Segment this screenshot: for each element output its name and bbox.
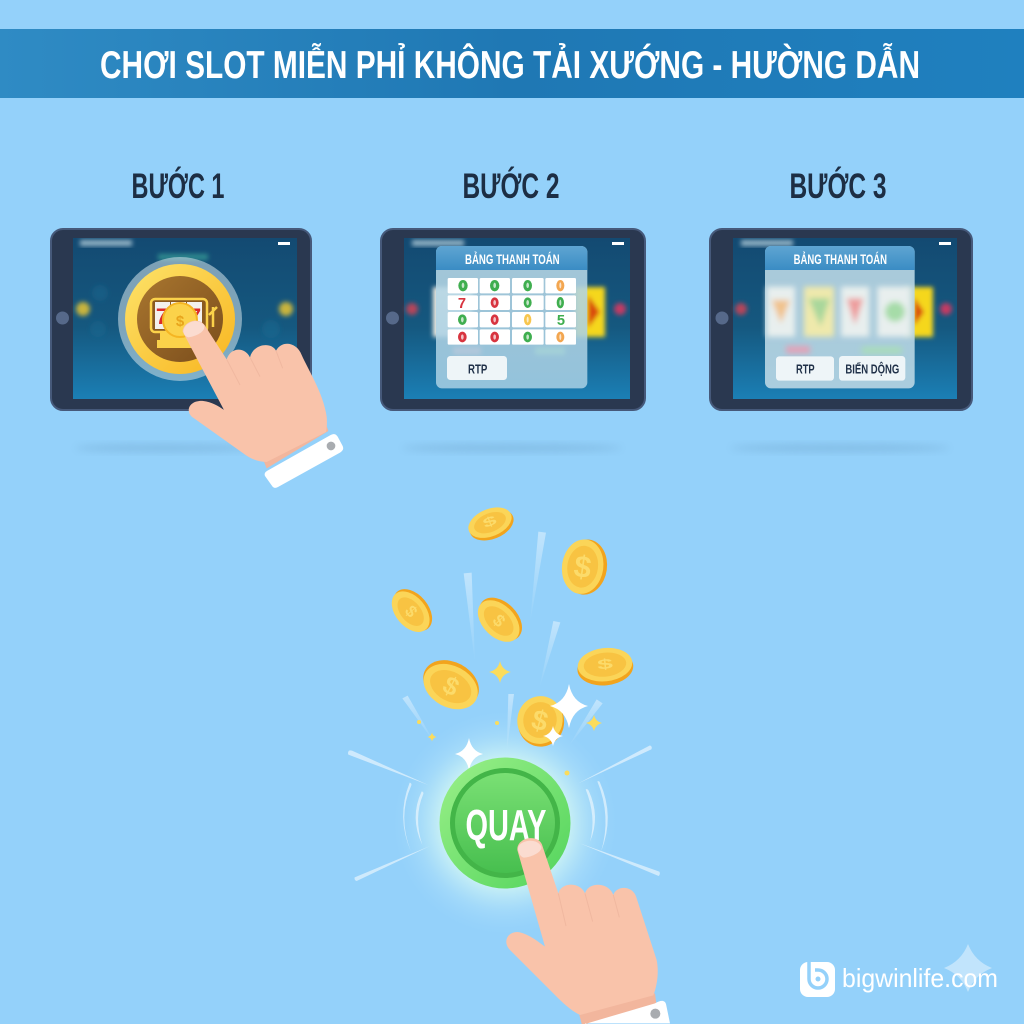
heading: step 3: BƯỚC 3 xyxy=(790,166,886,206)
panel: paytable: 7 xyxy=(458,296,466,312)
panel: paytable xyxy=(436,246,587,388)
panel: paytable: BẢNG THANH TOÁN xyxy=(465,252,560,267)
icon: slot machine medal: $ xyxy=(176,313,185,330)
coin: $ xyxy=(596,655,614,673)
coin xyxy=(384,582,440,640)
button: RTP xyxy=(776,356,834,381)
coin: $ xyxy=(572,549,593,585)
coin: $ xyxy=(481,513,499,531)
heading: step 2: BƯỚC 2 xyxy=(462,166,560,206)
coin xyxy=(414,651,487,718)
icon: slot machine medal xyxy=(118,257,242,381)
coin: $ xyxy=(438,671,463,702)
button: QUAY: QUAY xyxy=(466,801,546,850)
coins xyxy=(384,501,635,752)
panel: paytable with RTP and volatility: BẢNG THANH TOÁN xyxy=(794,252,887,267)
coin: $ xyxy=(528,703,552,738)
button: volatility: BIẾN DỘNG xyxy=(845,362,899,377)
glow xyxy=(393,711,617,935)
rays above button xyxy=(402,532,603,753)
cuff xyxy=(585,1001,670,1024)
coin xyxy=(511,691,570,752)
icon: slot machine medal: 7 xyxy=(156,304,168,329)
coin: $ xyxy=(489,610,510,631)
button: volatility xyxy=(839,356,905,381)
button: RTP: RTP xyxy=(796,362,815,377)
title banner xyxy=(0,29,1024,98)
watermark logo xyxy=(800,944,998,997)
panel: step 1 tablet xyxy=(51,229,311,410)
button: RTP: RTP xyxy=(468,361,487,376)
sparkles xyxy=(417,661,602,776)
heading: step 1: BƯỚC 1 xyxy=(132,166,224,206)
coin xyxy=(464,501,518,547)
motion lines xyxy=(348,745,660,881)
coin xyxy=(469,589,530,650)
icon: slot machine medal: 7 xyxy=(189,304,201,329)
button: RTP xyxy=(447,356,507,380)
tablet shadows xyxy=(75,444,950,452)
panel: step 3 tablet xyxy=(710,229,972,410)
watermark logo: bigwinlife.com xyxy=(842,963,998,993)
coin xyxy=(558,536,611,597)
panel: step 2 tablet xyxy=(381,229,645,410)
coin xyxy=(575,645,635,688)
button: QUAY xyxy=(440,758,570,888)
hand: step 1 xyxy=(183,321,343,488)
hand: spin button xyxy=(506,838,670,1024)
coin: $ xyxy=(401,602,422,622)
panel: paytable with RTP and volatility xyxy=(765,246,915,388)
panel: paytable: 5 xyxy=(557,313,565,329)
cuff xyxy=(265,434,343,488)
